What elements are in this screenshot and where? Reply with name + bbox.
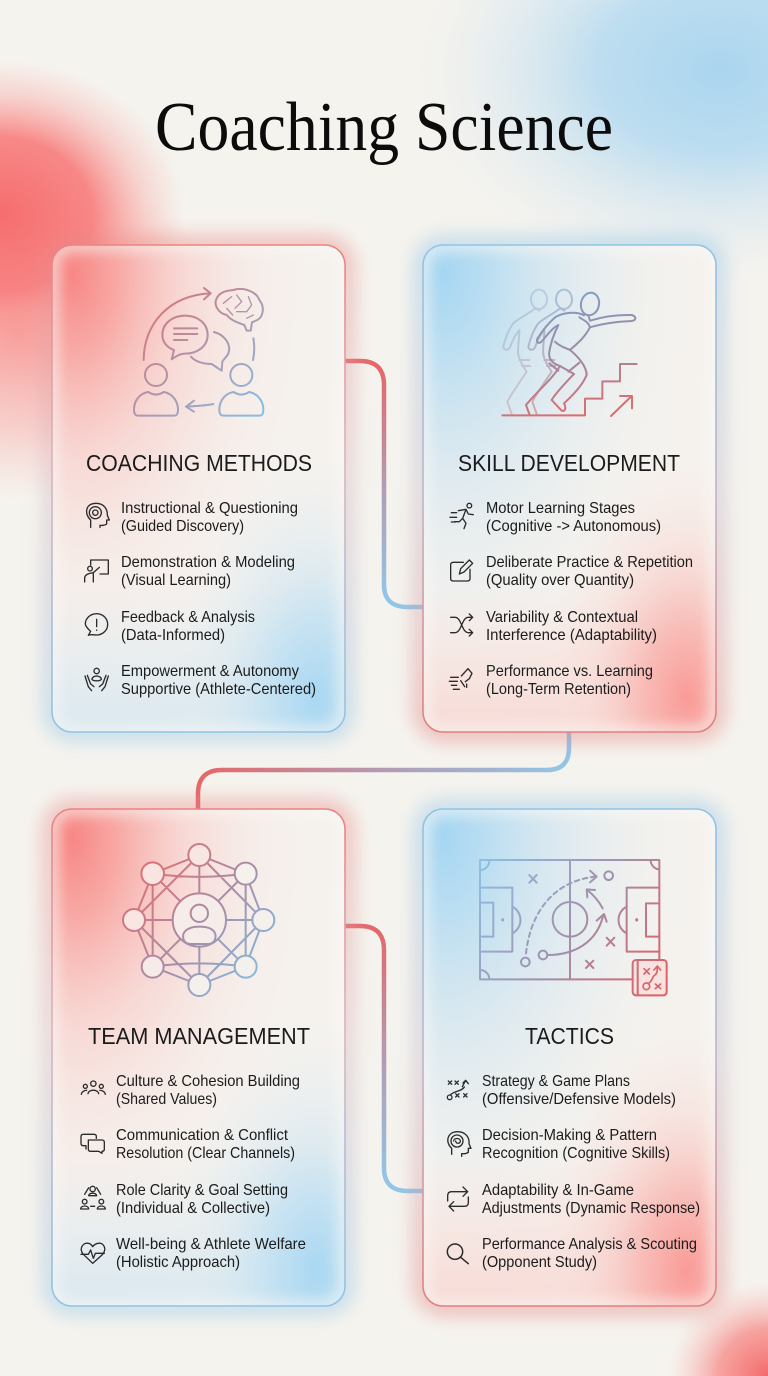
list item: instructional: (Guided Discovery) <box>121 518 244 535</box>
list item: role clarity <box>81 1182 288 1217</box>
heading: TACTICS <box>525 1023 614 1049</box>
list item: demonstration: Demonstration & Modeling <box>121 554 295 571</box>
heading: COACHING METHODS <box>86 450 312 476</box>
list item: deliberate practice: Deliberate Practice & Repetition <box>486 554 693 571</box>
list item: decision-making: Recognition (Cognitive Skills) <box>482 1145 670 1162</box>
list item: motor learning <box>450 500 661 535</box>
list item: culture: Culture & Cohesion Building <box>116 1073 300 1090</box>
connector: skill development to team management <box>198 732 569 809</box>
illustration: tactical pitch <box>480 860 667 995</box>
list item: empowerment <box>85 663 316 698</box>
list item: adaptability: Adjustments (Dynamic Response) <box>482 1200 700 1217</box>
list item: performance analysis <box>447 1236 697 1271</box>
heading: TEAM MANAGEMENT <box>88 1023 310 1049</box>
list item: decision-making: Decision-Making & Pattern <box>482 1127 657 1144</box>
illustration: team network <box>123 844 274 996</box>
panel: team management <box>52 809 345 1306</box>
illustration: runner climbing stairs <box>502 290 637 416</box>
list item: instructional: Instructional & Questioning <box>121 500 298 517</box>
list item: performance vs learning <box>449 663 653 698</box>
list item: performance analysis: (Opponent Study) <box>482 1254 597 1271</box>
list item: demonstration <box>85 554 295 589</box>
list item: performance vs learning: (Long-Term Retention) <box>486 681 631 698</box>
list item: instructional <box>87 500 298 535</box>
list item: culture: (Shared Values) <box>116 1091 217 1108</box>
list item: communication: Resolution (Clear Channels) <box>116 1145 295 1162</box>
list item: strategy: Strategy & Game Plans <box>482 1073 630 1090</box>
list item: communication: Communication & Conflict <box>116 1127 289 1144</box>
panel: skill development <box>423 245 716 732</box>
list item: well-being <box>81 1236 306 1271</box>
list item: strategy: (Offensive/Defensive Models) <box>482 1091 676 1108</box>
connector: coaching methods to skill development <box>345 361 423 607</box>
list item: variability: Variability & Contextual <box>486 609 638 626</box>
list item: variability <box>451 609 657 644</box>
list item: decision-making <box>448 1127 670 1162</box>
illustration: coaching cycle <box>134 288 263 416</box>
list item: motor learning: Motor Learning Stages <box>486 500 635 517</box>
list item: performance analysis: Performance Analysis & Scouting <box>482 1236 697 1253</box>
list item: well-being: Well-being & Athlete Welfare <box>116 1236 306 1253</box>
list item: adaptability: Adaptability & In-Game <box>482 1182 634 1199</box>
list item: demonstration: (Visual Learning) <box>121 572 231 589</box>
list item: feedback <box>85 609 255 644</box>
list item: deliberate practice <box>451 554 693 589</box>
list item: strategy <box>447 1073 676 1108</box>
title: Coaching Science <box>155 89 613 166</box>
list item: empowerment: Supportive (Athlete-Centered) <box>121 681 316 698</box>
list item: culture <box>81 1073 300 1108</box>
list item: communication <box>81 1127 295 1162</box>
heading: SKILL DEVELOPMENT <box>458 450 680 476</box>
list item: adaptability <box>448 1182 700 1217</box>
list item: motor learning: (Cognitive -> Autonomous) <box>486 518 661 535</box>
list item: feedback: Feedback & Analysis <box>121 609 255 626</box>
list item: empowerment: Empowerment & Autonomy <box>121 663 299 680</box>
list item: feedback: (Data-Informed) <box>121 627 225 644</box>
panel: tactics <box>423 809 716 1306</box>
list item: role clarity: (Individual & Collective) <box>116 1200 270 1217</box>
list item: deliberate practice: (Quality over Quantity) <box>486 572 634 589</box>
list item: variability: Interference (Adaptability) <box>486 627 657 644</box>
panel: coaching methods <box>52 245 345 732</box>
list item: performance vs learning: Performance vs. Learning <box>486 663 653 680</box>
connector: team management to tactics <box>345 926 423 1191</box>
list item: role clarity: Role Clarity & Goal Setting <box>116 1182 288 1199</box>
list item: well-being: (Holistic Approach) <box>116 1254 240 1271</box>
